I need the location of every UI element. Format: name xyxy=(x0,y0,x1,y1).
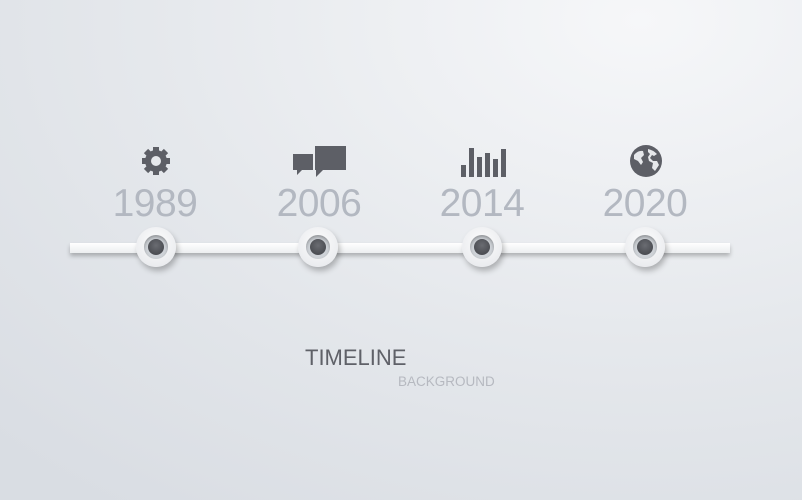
year 1989: 1989 xyxy=(113,182,197,225)
title: TIMELINE xyxy=(305,345,406,370)
timeline bar xyxy=(70,243,730,253)
node 2014 xyxy=(462,227,502,267)
year 2020: 2020 xyxy=(603,182,687,225)
year 2014: 2014 xyxy=(440,182,524,225)
node 2006 xyxy=(298,227,338,267)
icon: gear xyxy=(142,147,170,175)
icon: speech bubbles xyxy=(293,146,346,177)
icon: bar chart xyxy=(461,148,506,177)
node 1989 xyxy=(136,227,176,267)
subtitle: BACKGROUND xyxy=(398,374,495,389)
year 2006: 2006 xyxy=(277,182,361,225)
node 2020 xyxy=(625,227,665,267)
icon: globe xyxy=(630,145,662,177)
